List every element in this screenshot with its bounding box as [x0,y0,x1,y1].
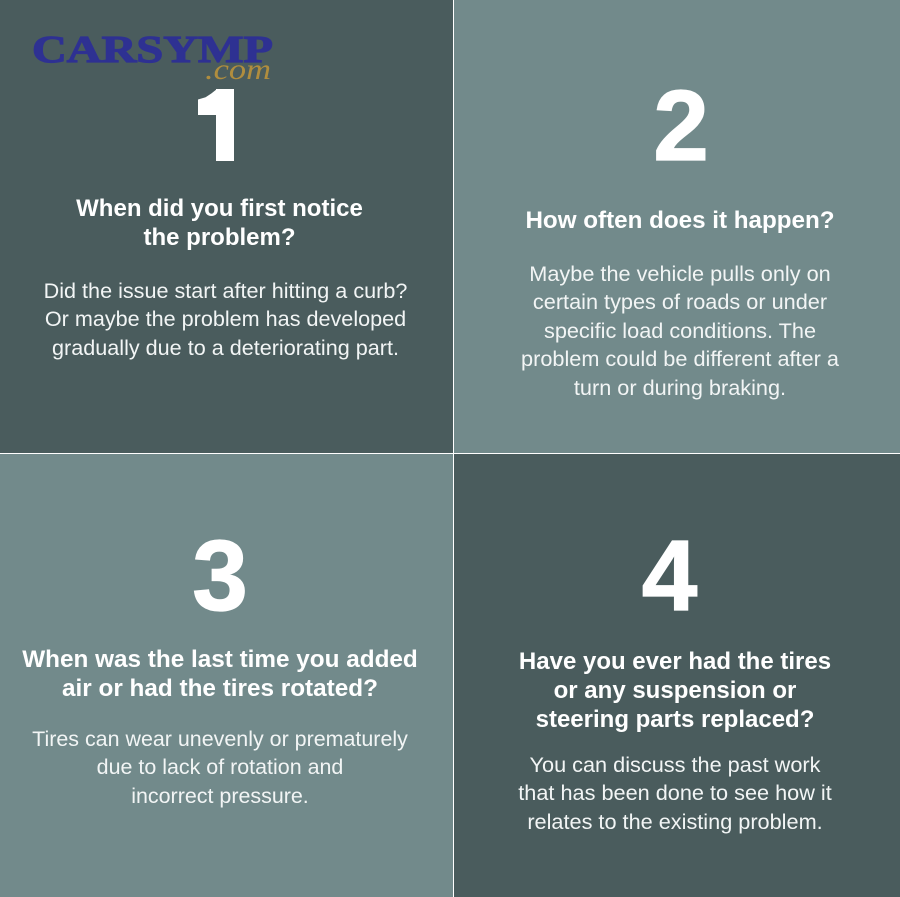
heading: question 2: How often does it happen? [525,207,835,234]
body: question 4: relates to the existing problem. [527,809,823,834]
body: question 1 [44,278,407,360]
body: question 2: Maybe the vehicle pulls only on [529,261,831,286]
body: question 4: that has been done to see how it [518,780,832,805]
body: question 3: Tires can wear unevenly or prematurely [32,727,408,751]
body: question 4 [518,752,832,834]
body: question 1: Did the issue start after hitting a curb? [44,278,407,303]
heading: question 4: Have you ever had the tires [519,648,831,675]
panel: question 3 [0,454,453,897]
panel: question 4 [454,454,900,897]
body: question 3: due to lack of rotation and [97,755,343,779]
number 4: 4 [642,520,697,632]
heading: question 3 [22,646,418,702]
heading: question 4: or any suspension or [554,677,796,704]
number 3: 3 [192,520,248,632]
body: question 2: specific load conditions. The [544,318,816,343]
number 1: 1 [197,70,253,182]
number 2: 2 [653,70,709,182]
heading: question 3: When was the last time you added [22,646,418,673]
body: question 2: turn or during braking. [574,375,786,400]
heading: question 3: air or had the tires rotated? [62,675,378,702]
body: question 4: You can discuss the past work [530,752,820,777]
panel: question 2 [454,0,900,453]
body: question 1: Or maybe the problem has developed [45,306,406,331]
logo: carsymp.com [32,30,273,84]
heading: question 4 [519,648,831,733]
heading: question 4: steering parts replaced? [536,706,814,733]
heading: question 1: When did you first notice [76,195,363,222]
body: question 2: certain types of roads or under [533,289,827,314]
number 1 [198,89,234,161]
heading: question 1 [76,195,363,251]
body: question 2 [521,261,839,400]
body: question 2: problem could be different after a [521,346,839,371]
panel: question 1 [0,0,453,453]
body: question 1: gradually due to a deteriorating part. [52,335,399,360]
logo: carsymp.com: CARSYMP [32,30,273,71]
body: question 3: incorrect pressure. [131,784,309,808]
heading: question 1: the problem? [143,224,296,251]
body: question 3 [32,727,408,808]
